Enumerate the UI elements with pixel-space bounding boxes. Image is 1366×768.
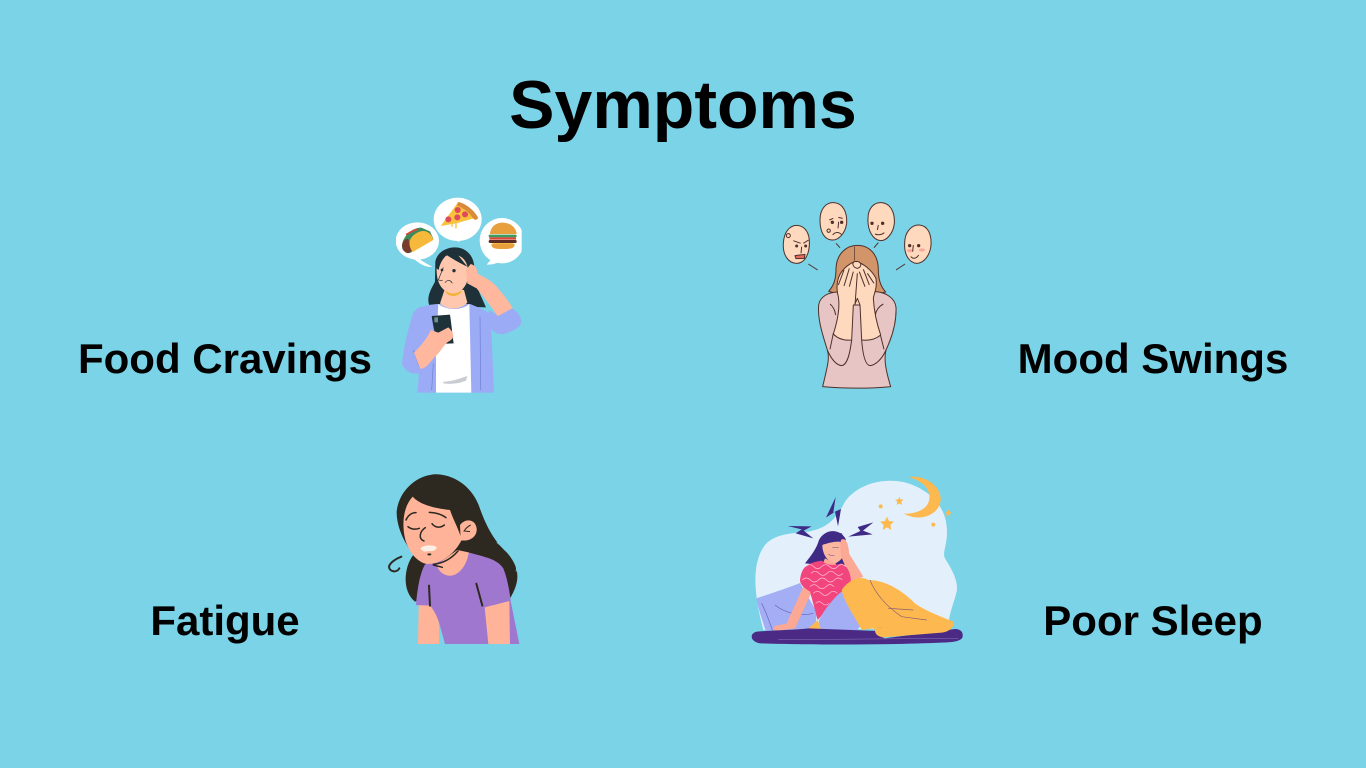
- face: [437, 255, 468, 293]
- forearm and hand: [414, 327, 453, 369]
- jacket body: [417, 304, 494, 393]
- neck: [437, 550, 469, 576]
- icon: tired woman with fatigue: [389, 474, 519, 644]
- hair back: [428, 247, 486, 307]
- mask: angry: [783, 225, 818, 270]
- left sleeve: [402, 306, 424, 374]
- arms: [418, 604, 439, 644]
- pink top: [800, 561, 851, 620]
- raised arm: [466, 264, 513, 317]
- hair: [805, 531, 846, 565]
- raised arm: [840, 539, 863, 582]
- label: poor sleep: Poor Sleep: [1043, 597, 1263, 644]
- label: food cravings: Food Cravings: [78, 335, 372, 382]
- speech bubble: pizza: [434, 198, 482, 243]
- forearms and hands: [833, 262, 881, 340]
- speech bubble: burger: [480, 218, 524, 265]
- label: mood swings: Mood Swings: [1018, 335, 1288, 382]
- illustrations canvas: [388, 198, 963, 644]
- mask: happy: [896, 225, 931, 270]
- right sleeve: [488, 308, 521, 334]
- ear: [460, 520, 477, 541]
- title: Symptoms: [509, 67, 857, 143]
- stars: [879, 497, 952, 530]
- mattress: [752, 628, 963, 645]
- hair: [829, 245, 886, 298]
- icon: woman with food cravings: [396, 198, 524, 393]
- lightning bolts: [788, 497, 873, 538]
- purple shirt: [416, 552, 519, 644]
- white shirt: [436, 304, 471, 393]
- pillow: [756, 583, 817, 631]
- phone: [432, 315, 454, 344]
- icon: woman covering face with mood masks: [783, 203, 931, 388]
- mask: calm: [868, 203, 894, 248]
- face: [403, 497, 462, 564]
- blanket: [842, 578, 953, 637]
- neck: [822, 558, 837, 567]
- hair back: [397, 474, 517, 602]
- mask: sad: [820, 203, 847, 248]
- sigh swirl: [389, 557, 401, 571]
- head: [822, 542, 845, 563]
- icon: woman with poor sleep: [752, 477, 963, 645]
- background cloud: [755, 481, 957, 630]
- sleeve lines: [429, 584, 482, 606]
- far arm: [773, 587, 813, 631]
- leg: [819, 592, 865, 631]
- speech bubble: taco: [396, 222, 439, 267]
- arms: [827, 304, 886, 366]
- pink top: [818, 292, 896, 388]
- label: fatigue: Fatigue: [150, 597, 300, 644]
- neck: [440, 288, 467, 308]
- facial features: [406, 512, 458, 567]
- moon: [904, 477, 941, 518]
